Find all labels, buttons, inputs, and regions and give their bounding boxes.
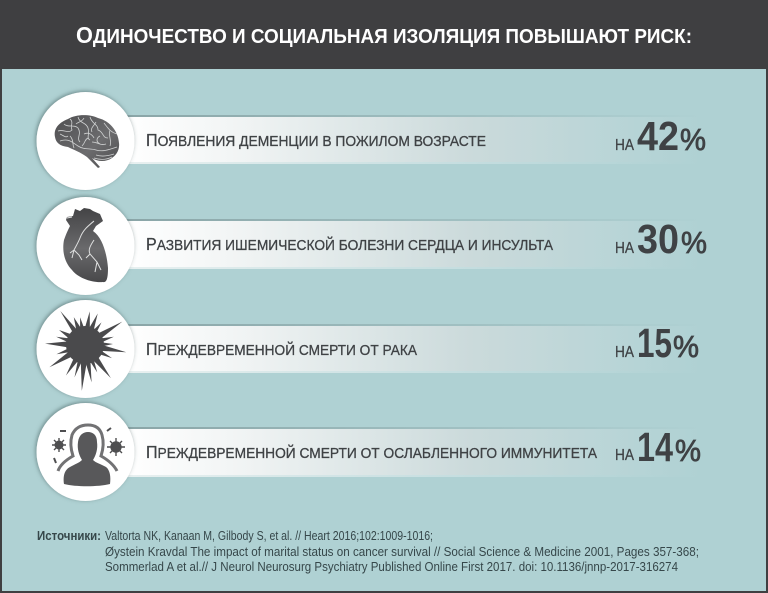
value: 14%: % [675,433,701,468]
icon circle: heart [36,197,134,295]
row: heart disease [36,197,707,295]
sources: Источники: [37,529,101,543]
value: 14%: 14 [637,424,673,470]
value: 15% [615,320,699,366]
value: 42%: % [680,122,706,157]
value: 30%: % [681,225,707,260]
row: immunity [36,403,701,501]
bar: heart disease [125,219,700,269]
row: cancer [36,300,700,398]
value: 42%: 42 [637,113,679,159]
sources: Sommerlad A et al.// J Neurol Neurosurg Psychiatry Published Online First 2017. doi: 10.1136/jnnp-2017-316274 [105,560,678,574]
icon circle: burst [36,300,134,398]
label: immunity: ПРЕЖДЕВРЕМЕННОЙ СМЕРТИ ОТ ОСЛАБЛЕННОГО ИММУНИТЕТА [146,442,597,462]
value: 15%: % [673,329,699,364]
label: heart disease: РАЗВИТИЯ ИШЕМИЧЕСКОЙ БОЛЕЗНИ СЕРДЦА И ИНСУЛЬТА [146,234,553,254]
icon circle: person with viruses [36,403,134,501]
value: 30% [615,216,707,262]
sources: Valtorta NK, Kanaan M, Gilbody S, et al. // Heart 2016;102:1009-1016; [105,529,433,543]
bar: immunity [125,427,700,477]
row: dementia [36,92,706,190]
value: 42% [615,113,706,159]
value: 14% [615,424,701,470]
bar: dementia [125,115,700,164]
icon circle: brain [36,92,134,190]
label: cancer: ПРЕЖДЕВРЕМЕННОЙ СМЕРТИ ОТ РАКА [146,339,417,359]
value: 42%: НА [615,137,634,154]
title: ОДИНОЧЕСТВО И СОЦИАЛЬНАЯ ИЗОЛЯЦИЯ ПОВЫШАЮТ РИСК: [76,22,692,48]
value: 30%: НА [615,240,634,257]
label: dementia: ПОЯВЛЕНИЯ ДЕМЕНЦИИ В ПОЖИЛОМ ВОЗРАСТЕ [146,130,486,150]
bar: cancer [125,324,700,373]
value: 15%: 15 [637,320,672,366]
sources: Øystein Kravdal The impact of marital status on cancer survival // Social Science & Medicine 2001, Pages 357-368; [105,545,699,559]
value: 14%: НА [615,447,634,464]
sources [37,529,699,574]
value: 15%: НА [615,344,634,361]
value: 30%: 30 [637,216,679,262]
